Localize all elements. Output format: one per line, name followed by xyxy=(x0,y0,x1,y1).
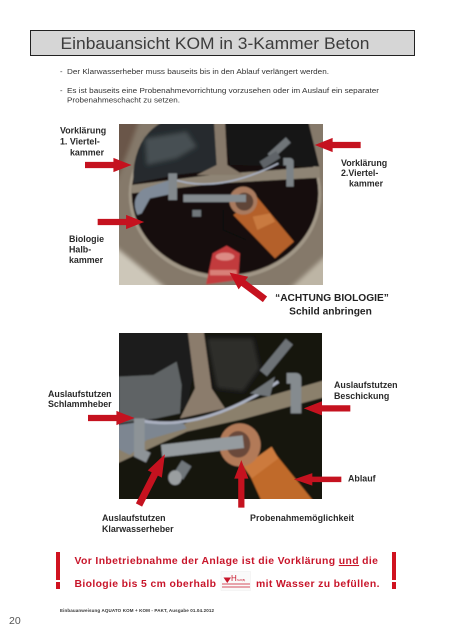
icon: water level symbol: H xyxy=(231,574,237,583)
text block: warning line 2 right: mit Wasser zu befüllen. xyxy=(256,579,380,590)
label: Auslaufstutzen Schlammheber: Schlammheber xyxy=(48,399,112,409)
label: Ablauf: Ablauf xyxy=(348,474,376,484)
label: Vorklärung 2. Viertelkammer: kammer xyxy=(349,178,384,188)
text block: warning line 1: Vor Inbetriebnahme der Anlage ist die Vorklärung und die xyxy=(74,556,378,567)
photo: pipe close-up xyxy=(119,333,322,499)
icon: right exclamation mark xyxy=(392,552,396,589)
arrow: Beschickung xyxy=(304,401,350,415)
arrow: Vorklärung 2 xyxy=(315,138,361,152)
label: Auslaufstutzen Klarwasserheber: Klarwasserheber xyxy=(102,524,174,534)
arrow: Vorklärung 1 xyxy=(85,158,132,172)
label: Vorklärung 1. Viertelkammer: Vorklärung xyxy=(60,126,106,136)
arrow: Probenahme xyxy=(234,460,248,508)
arrow: Biologie xyxy=(98,215,144,229)
label: Auslaufstutzen Beschickung: Auslaufstutzen xyxy=(334,380,398,390)
label: Vorklärung 1. Viertelkammer: 1. Viertel- xyxy=(60,136,100,146)
title xyxy=(30,30,414,56)
label: Auslaufstutzen Klarwasserheber: Auslaufstutzen xyxy=(102,513,166,523)
text block: warning line 2 left: Biologie bis 5 cm oberhalb xyxy=(74,579,216,590)
footer text: Einbauanweisung AQUATO KOM + KOM - PAKT, Ausgabe 01.04.2012 xyxy=(60,608,214,613)
text block: notes: Der Klarwasserheber muss bauseits bis in den Ablauf verlängert werden. xyxy=(67,67,329,76)
label: Achtung Biologie: “ACHTUNG BIOLOGIE” xyxy=(275,293,389,304)
photo: chamber from above xyxy=(119,124,323,285)
text block: notes: - xyxy=(60,86,63,95)
arrow: Schlammheber xyxy=(88,411,135,425)
text block: notes: Es ist bauseits eine Probenahmevorrichtung vorzusehen oder im Auslauf ein separater xyxy=(67,86,379,95)
label: Biologie Halbkammer: Halb- xyxy=(69,244,91,254)
arrow: Schild xyxy=(225,266,270,306)
panel: bottom photo with labels xyxy=(88,325,350,509)
label: Achtung Biologie: Schild anbringen xyxy=(289,306,372,318)
title: Einbauansicht KOM in 3-Kammer Beton xyxy=(60,35,370,53)
icon: water level symbol xyxy=(221,572,250,590)
text block: notes: - xyxy=(60,67,63,76)
icon: water level symbol: NLB(B) xyxy=(237,579,245,582)
panel: top photo with labels xyxy=(85,111,361,306)
icon: left exclamation mark xyxy=(56,552,60,589)
arrow: Klarwasserheber xyxy=(132,451,172,509)
callout: warning xyxy=(56,552,396,590)
label: Biologie Halbkammer: Biologie xyxy=(69,234,104,244)
text block: notes xyxy=(60,67,379,104)
label: Auslaufstutzen Schlammheber: Auslaufstutzen xyxy=(48,389,112,399)
text block: notes: Probenahmeschacht zu setzen. xyxy=(67,96,180,104)
page number: 20 xyxy=(9,615,21,627)
label: Vorklärung 2. Viertelkammer: 2.Viertel- xyxy=(341,168,378,178)
label: Auslaufstutzen Beschickung: Beschickung xyxy=(334,391,389,401)
label: Biologie Halbkammer: kammer xyxy=(69,255,104,265)
label: Vorklärung 2. Viertelkammer: Vorklärung xyxy=(341,158,387,168)
label: Probenahmemöglichkeit: Probenahmemöglichkeit xyxy=(250,513,354,523)
label: Vorklärung 1. Viertelkammer: kammer xyxy=(70,148,105,158)
arrow: Ablauf xyxy=(294,473,341,486)
